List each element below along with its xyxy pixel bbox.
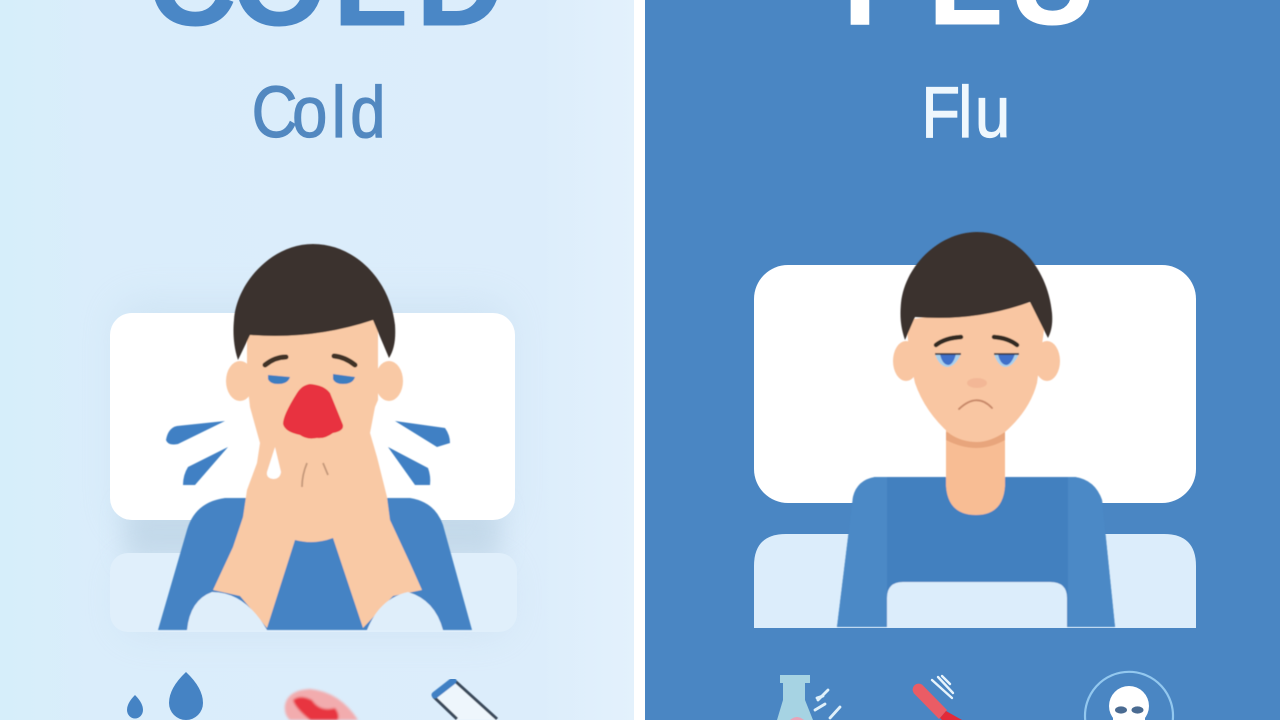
icon: tissue box	[434, 681, 497, 720]
icon: thermometer	[913, 684, 962, 720]
icon: sore throat	[285, 689, 358, 720]
panel: flu	[645, 0, 1280, 720]
fingers	[302, 463, 328, 487]
icon: flask dashes	[815, 690, 840, 718]
eyebrows	[265, 356, 355, 365]
icon: flask	[777, 675, 813, 720]
red nose	[283, 384, 343, 439]
shirt	[837, 477, 1115, 627]
neck	[946, 430, 1005, 515]
icon: water drops	[127, 672, 203, 720]
eyebrows	[936, 337, 1017, 345]
icon: skull in circle	[1085, 672, 1173, 720]
white drip	[267, 447, 281, 479]
hair	[233, 244, 395, 360]
chin shadow	[946, 432, 1005, 448]
panel: cold	[0, 0, 634, 720]
ears	[226, 361, 403, 401]
blanket: cold	[110, 553, 517, 632]
pillow: cold	[110, 313, 515, 520]
sleeves	[187, 592, 443, 630]
subheading: Flu: Flu	[921, 73, 1010, 153]
figure: tired person	[837, 232, 1115, 627]
subheading: Cold: Cold	[252, 73, 385, 153]
figure: sneezing person	[158, 244, 472, 630]
blanket fold	[887, 582, 1067, 627]
eyes	[268, 374, 355, 384]
face and hands	[213, 315, 422, 628]
shirt	[158, 498, 472, 630]
hair	[900, 232, 1052, 340]
ears	[893, 341, 1060, 381]
face	[906, 300, 1048, 442]
nose	[967, 378, 987, 388]
sneeze splashes	[166, 421, 450, 485]
eyes	[935, 354, 1019, 367]
blanket: flu	[754, 534, 1196, 628]
pillow: flu	[754, 265, 1196, 503]
icon: thermometer dashes	[932, 676, 953, 698]
mouth	[959, 400, 992, 409]
shirt side bands	[837, 477, 1115, 627]
